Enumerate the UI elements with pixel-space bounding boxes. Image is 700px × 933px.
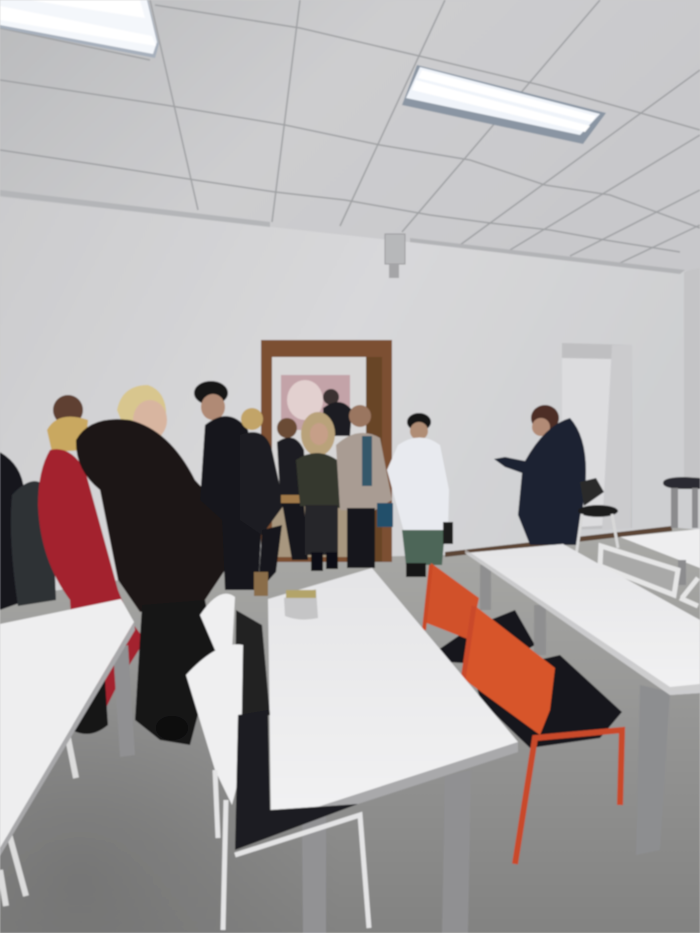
right side wall xyxy=(684,266,700,480)
ceiling light: left xyxy=(0,0,159,58)
wall speaker xyxy=(385,234,405,278)
baseboard xyxy=(445,526,672,557)
person: woman in white puffer coat xyxy=(387,413,453,577)
items on table xyxy=(284,589,318,620)
chair: orange front xyxy=(463,605,622,864)
person: backpack xyxy=(11,481,56,606)
person: woman behind xyxy=(240,408,284,596)
stool with bag xyxy=(576,478,618,556)
alcove xyxy=(562,343,632,530)
person: woman far left in black xyxy=(0,452,28,610)
people xyxy=(0,381,586,745)
person: woman in navy coat gesturing xyxy=(494,405,586,545)
ceiling light: right xyxy=(402,65,606,144)
far table by wall xyxy=(663,477,700,528)
chair: orange back xyxy=(424,563,535,690)
back wall xyxy=(0,190,700,590)
person: woman in fur hood xyxy=(296,412,340,571)
person: far background in doorway xyxy=(323,389,352,436)
person: woman in doorway xyxy=(277,418,308,560)
person: woman in beige jacket xyxy=(336,405,393,568)
person: blonde woman in fur coat xyxy=(76,385,232,745)
person: man in black with headphones xyxy=(194,381,262,590)
table: far right xyxy=(620,529,700,585)
chairs: white behind right table xyxy=(600,546,698,606)
chairs: white left of center table xyxy=(186,594,369,930)
ceiling xyxy=(0,0,700,274)
floor xyxy=(0,527,700,933)
door xyxy=(261,340,392,562)
person: woman in red jacket xyxy=(38,395,145,734)
table: right xyxy=(465,544,700,855)
table: left xyxy=(0,599,135,906)
table: center xyxy=(268,568,518,933)
